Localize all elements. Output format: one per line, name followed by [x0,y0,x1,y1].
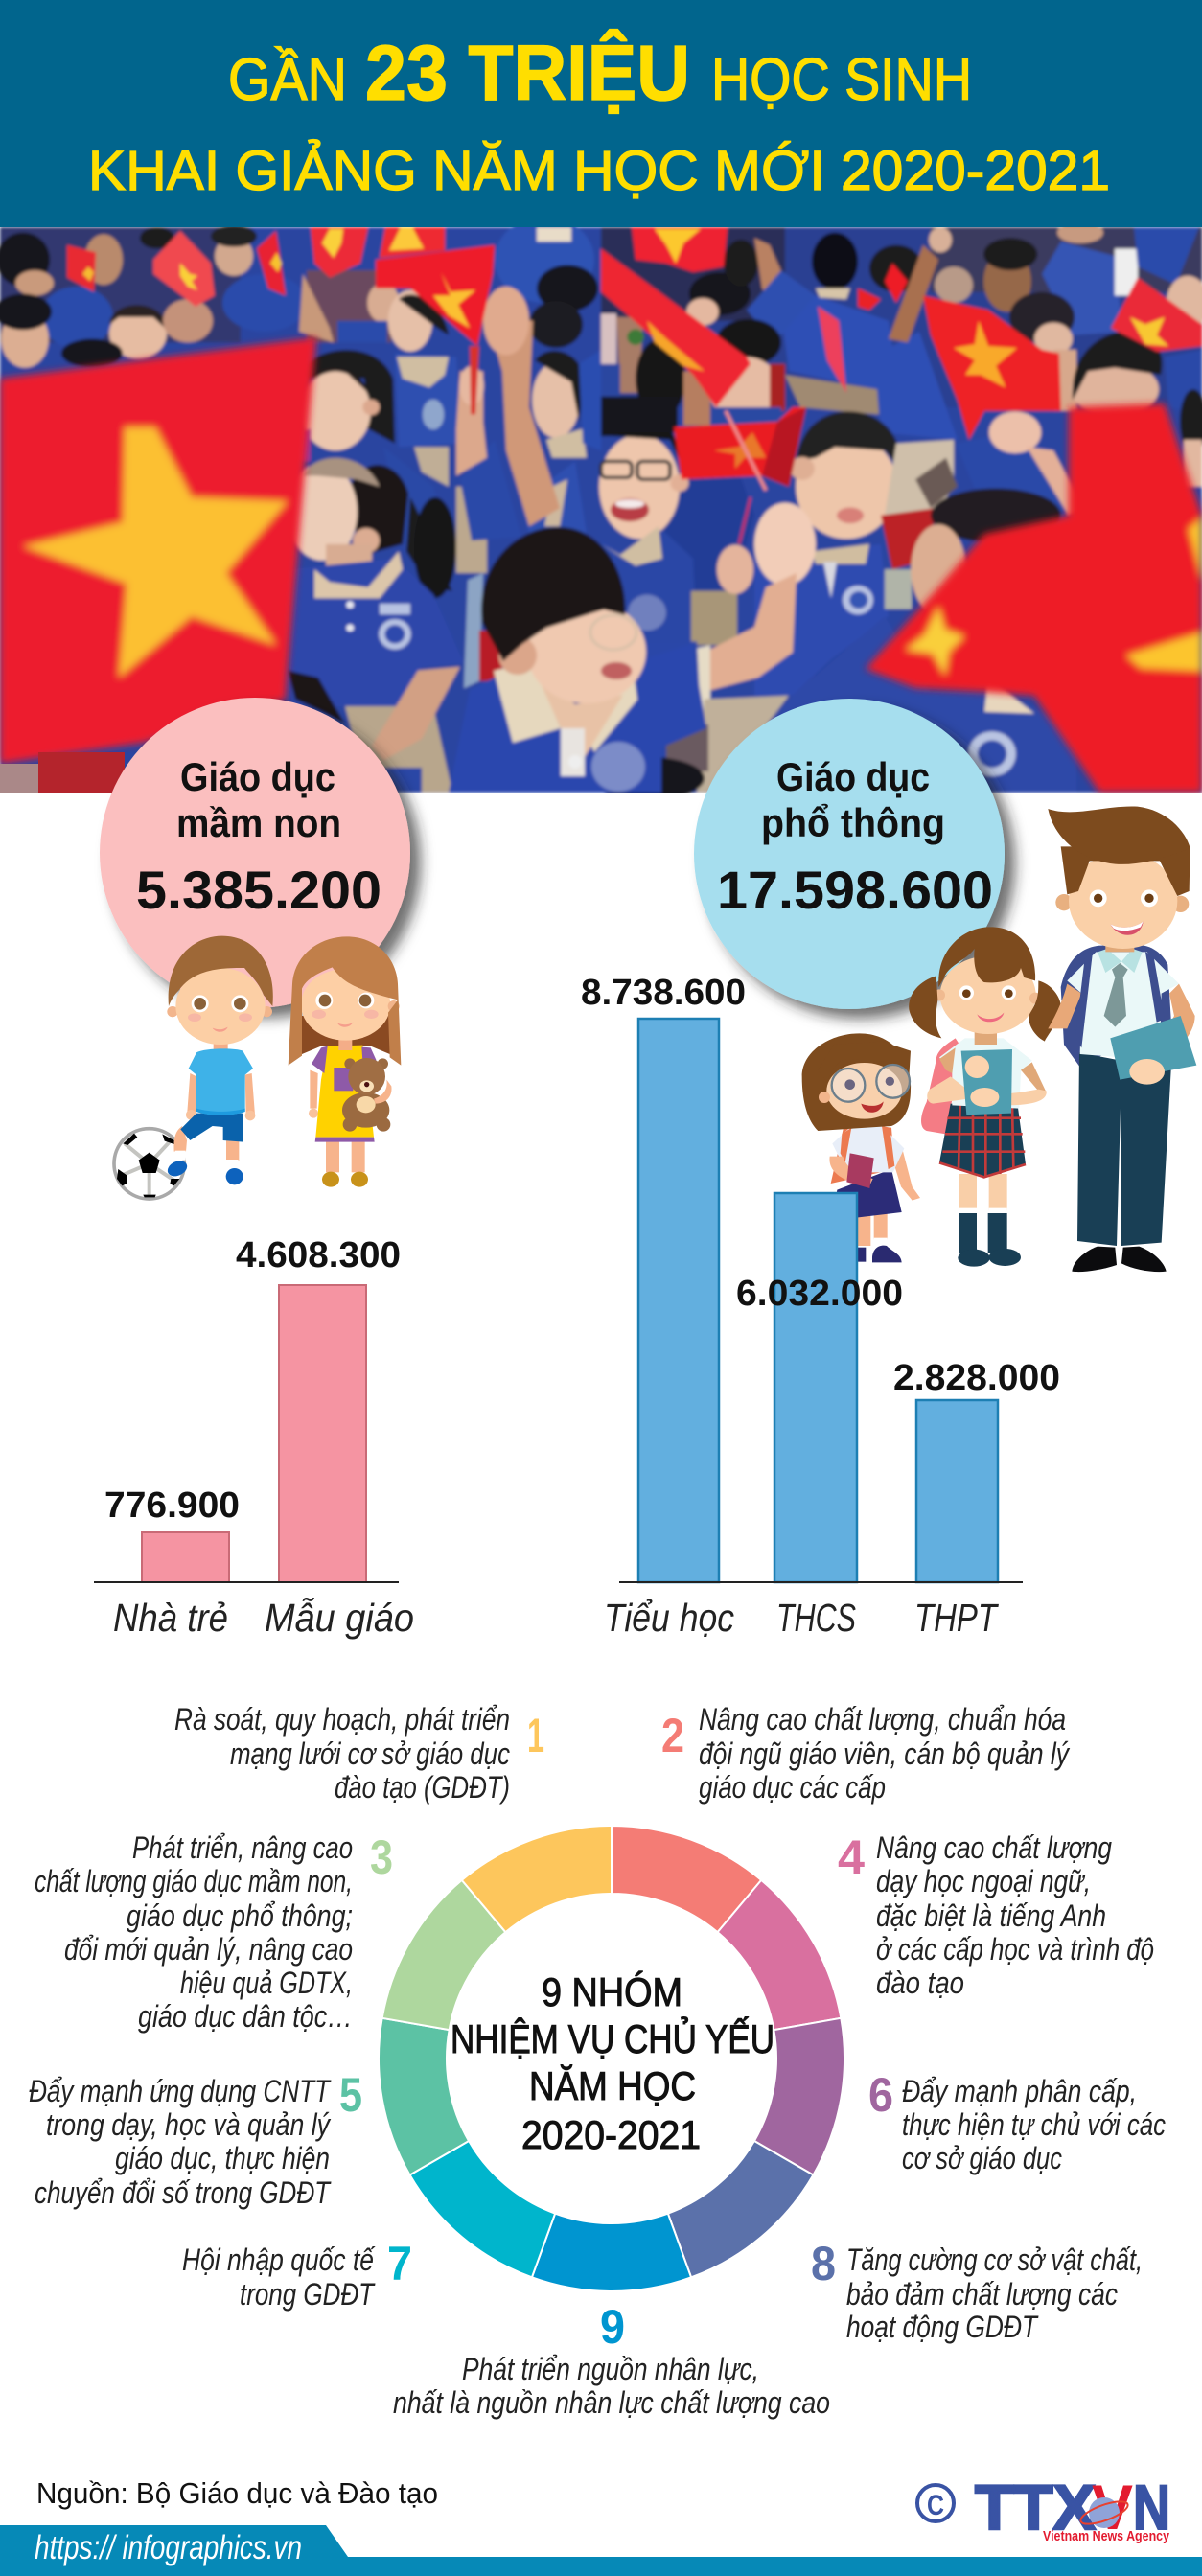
illustration: preschool children [114,936,401,1199]
value: THCS: 6.032.000 [736,1274,903,1314]
task 1: Rà soát, quy hoạch, phát triển [174,1702,510,1736]
task 7 [182,2237,412,2312]
top flags left [376,245,495,346]
task 5: trong dạy, học và quản lý [46,2107,332,2142]
preschool heading [176,754,341,845]
task 5 [29,2068,362,2210]
title banner [0,0,1202,227]
donut chart: 9 task groups [379,1826,844,2291]
circle: preschool education [100,698,410,1008]
title line 2: KHAI GIẢNG NĂM HỌC MỚI 2020-2021 [88,140,1110,202]
big flag left [0,337,316,764]
task 8: hoạt động GDĐT [846,2310,1039,2344]
task 4: 4 [838,1830,865,1884]
label: Mẫu giáo: Mẫu giáo [265,1596,414,1640]
task 1: đào tạo (GDĐT) [335,1770,510,1805]
bar: Tiểu học [638,1019,719,1582]
task 3: đổi mới quản lý, nâng cao [64,1932,353,1966]
boy with glasses [599,434,680,539]
general total: 17.598.600 [717,860,993,920]
task 7: trong GDĐT [240,2277,376,2312]
task 3: 3 [370,1830,393,1884]
beige pants [885,440,954,516]
task 8 [811,2237,1143,2344]
hidden boy [956,429,1073,512]
second girl at far right [532,362,580,438]
title line 1: GẦN [228,47,347,113]
donut centre title: NHIỆM VỤ CHỦ YẾU [451,2015,774,2061]
bar: THCS [774,1193,857,1582]
task 5: Đẩy mạnh ứng dụng CNTT [29,2074,332,2108]
teen boy with backpack [1048,807,1196,1272]
task 5: giáo dục, thực hiện [115,2141,330,2175]
task 6 [868,2068,1166,2175]
task 9: nhất là nguồn nhân lực chất lượng cao [393,2385,830,2420]
logo: TTXVN: Vietnam News Agency [1043,2528,1170,2544]
task 6: cơ sở giáo dục [902,2141,1062,2175]
smiling boy [754,534,889,696]
girl foreground [406,497,452,591]
task 8: 8 [811,2237,836,2290]
title line 1: HỌC SINH [711,47,972,113]
foreground blue shirt [708,616,1076,793]
task 3: giáo dục dân tộc… [138,1999,353,2034]
source: Nguồn: Bộ Giáo dục và Đào tạo [36,2476,438,2510]
value: Nhà trẻ: 776.900 [104,1485,240,1526]
task 4: Nâng cao chất lượng [876,1830,1112,1865]
task 7: Hội nhập quốc tế [182,2242,376,2277]
icon: football [114,1129,184,1199]
label: Tiểu học: Tiểu học [604,1596,734,1640]
footer bar [0,2525,1202,2576]
boy [165,936,273,1184]
task 4: dạy học ngoại ngữ, [876,1864,1091,1898]
bar chart: general education [581,973,1060,1640]
task 3 [35,1830,393,2034]
bar chart: preschool [94,1235,414,1640]
logo: TTXVN [917,2472,1170,2544]
task 5: 5 [339,2068,362,2122]
label: THPT: THPT [914,1596,999,1640]
logo: TTXVN: TTX [975,2472,1096,2542]
task 1 [174,1702,544,1805]
task 2 [661,1702,1071,1805]
donut centre title: 9 NHÓM [542,1969,682,2014]
title line 1 [228,30,972,117]
small girl with glasses [802,1033,920,1262]
girl with teddy bear [289,936,401,1187]
preschool heading: mầm non [176,800,341,845]
hands [717,545,753,594]
url: https:// infographics.vn [35,2529,302,2566]
value: Mẫu giáo: 4.608.300 [236,1235,401,1276]
task 4: đặc biệt là tiếng Anh [876,1898,1106,1933]
bar: Mẫu giáo [279,1285,366,1582]
girl mid [295,350,395,444]
teddy bear [342,1058,392,1132]
logo: TTXVN: N [1133,2472,1170,2542]
icon: copyright: C [927,2490,944,2521]
task 1: 1 [527,1709,544,1762]
icon: globe [1078,2497,1130,2528]
general heading [761,754,945,845]
task 3: giáo dục phổ thông; [127,1898,353,1933]
task 6: 6 [868,2068,893,2122]
photo: students waving flags [0,217,1202,800]
task 2: giáo dục các cấp [699,1770,886,1805]
task 9 [393,2300,830,2420]
donut centre title [451,1969,774,2157]
task 3: chất lượng giáo dục mầm non, [35,1864,353,1898]
task 2: 2 [661,1709,684,1762]
task 6: Đẩy mạnh phân cấp, [902,2074,1137,2108]
preschool total: 5.385.200 [136,860,381,920]
general heading: Giáo dục [776,754,930,799]
task 2: Nâng cao chất lượng, chuẩn hóa [699,1702,1066,1736]
circle: general education [694,699,1005,1009]
preschool heading: Giáo dục [180,754,335,799]
logo: TTXVN: V [1092,2472,1133,2542]
big flag right [866,403,1202,793]
task 9: 9 [600,2300,625,2354]
task 4 [838,1830,1154,2000]
task 3: hiệu quả GDTX, [180,1966,353,2000]
value: THPT: 2.828.000 [893,1358,1060,1398]
label: THCS: THCS [776,1596,856,1640]
middle girl with plaid skirt [909,927,1061,1267]
task 7: 7 [387,2237,412,2290]
bar: THPT [916,1400,998,1582]
donut centre title: 2020-2021 [521,2112,701,2157]
general heading: phổ thông [761,800,945,845]
donut centre title: NĂM HỌC [529,2063,696,2108]
raised arm [487,317,560,526]
task 9: Phát triển nguồn nhân lực, [462,2352,759,2386]
task 5: chuyển đổi số trong GDĐT [35,2175,332,2210]
task 2: đội ngũ giáo viên, cán bộ quản lý [699,1736,1071,1771]
task 1: mạng lưới cơ sở giáo dục [230,1736,510,1771]
foreground boy [449,527,706,793]
value: Tiểu học: 8.738.600 [581,973,746,1013]
title line 1: 23 TRIỆU [365,30,690,117]
illustration: school children [802,807,1196,1272]
task 8: bảo đảm chất lượng các [846,2277,1118,2312]
icon: copyright [917,2485,954,2521]
task 4: đào tạo [876,1966,964,2000]
bar: Nhà trẻ [142,1532,229,1582]
label: Nhà trẻ: Nhà trẻ [113,1596,228,1640]
task 3: Phát triển, nâng cao [132,1830,353,1865]
